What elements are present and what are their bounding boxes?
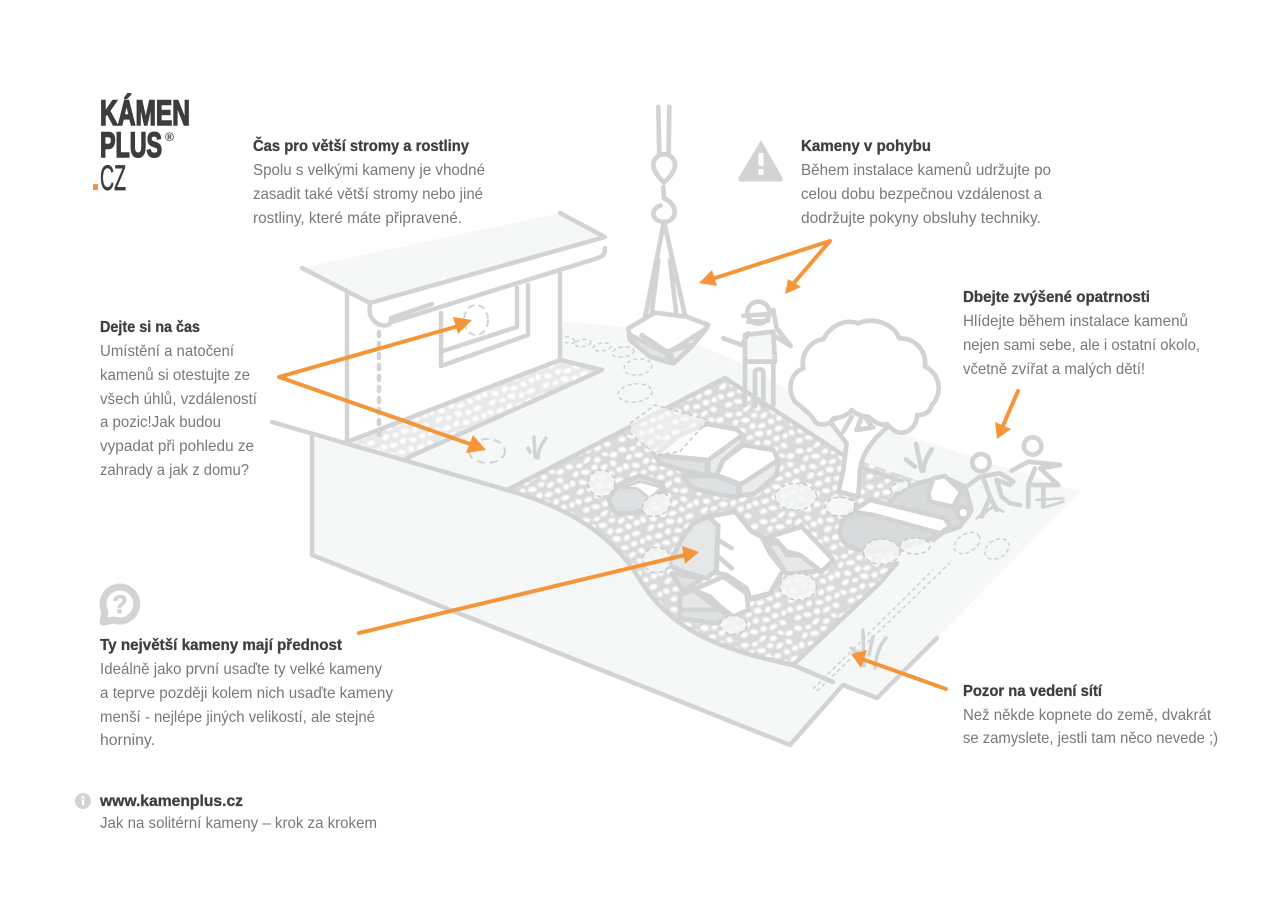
stone group back (655, 455, 707, 475)
text: Čas pro větší stromy a rostliny (253, 137, 485, 227)
crane hook and lifted stone (628, 107, 708, 363)
text: Kameny v pohybu: Kameny v pohybu (801, 138, 931, 155)
worker (723, 302, 791, 407)
text: source: Jak na solitérní kameny – krok za krokem (100, 815, 377, 832)
text: Ty největší kameny mají přednost: horniny. (100, 732, 155, 749)
window placement circle (464, 305, 488, 335)
small stone (608, 476, 665, 513)
text: Kameny v pohybu: dodržujte pokyny obsluhy techniky. (801, 210, 1041, 227)
text: Pozor na vedení sítí: Pozor na vedení sítí (963, 683, 1103, 700)
arrow: Ty největší kameny (359, 546, 699, 633)
house (302, 213, 605, 458)
child 2 (1012, 437, 1063, 507)
lawn and wall outline (272, 378, 937, 745)
arrow: Kameny v pohybu (699, 241, 830, 294)
child 1 (967, 454, 1020, 518)
illustration: garden scene (272, 107, 1080, 745)
text: Čas pro větší stromy a rostliny: zasadit také větší stromy nebo jiné (253, 186, 483, 203)
gravel bed (507, 378, 945, 665)
text: Čas pro větší stromy a rostliny: rostliny, které máte připravené. (253, 210, 462, 227)
text: Pozor na vedení sítí: se zamyslete, jestli tam něco nevede ;) (963, 730, 1218, 747)
roof surface (302, 213, 605, 303)
arrow: Dbejte zvýšené opatrnosti (995, 391, 1018, 439)
text: Ty největší kameny mají přednost (100, 637, 393, 749)
underground utility lines (813, 563, 950, 691)
logo: ® (165, 130, 174, 144)
text: Kameny v pohybu (801, 138, 1051, 227)
text: Kameny v pohybu: Během instalace kamenů udržujte po (801, 161, 1051, 179)
text: Dejte si na čas: zahrady a jak z domu? (100, 462, 249, 479)
tree (790, 321, 939, 497)
arrow: Dejte si na čas (279, 317, 486, 453)
logo: PLUS (100, 126, 162, 165)
text: Pozor na vedení sítí (963, 683, 1218, 747)
text: Dejte si na čas: Dejte si na čas (100, 319, 200, 336)
lawn placement ellipse (469, 439, 505, 463)
arrow: Pozor na vedení sítí (851, 650, 946, 689)
logo (93, 93, 190, 198)
ground surface (314, 322, 1080, 745)
main stones (588, 405, 857, 634)
text: Dejte si na čas (100, 319, 258, 479)
text: Dbejte zvýšené opatrnosti (963, 289, 1200, 378)
icon: question bubble (103, 587, 137, 622)
grass tuft (906, 444, 932, 471)
text: Ty největší kameny mají přednost: Ty největší kameny mají přednost (100, 637, 342, 654)
text: Ty největší kameny mají přednost: menší - nejlépe jiných velikostí, ale stejné (100, 709, 375, 726)
icon: warning triangle (739, 141, 782, 181)
text: Ty největší kameny mají přednost: Ideálně jako první usaďte ty velké kameny (100, 661, 382, 678)
text: source (99, 793, 377, 832)
logo: CZ (100, 159, 126, 198)
text: Dejte si na čas: Umístění a natočení (100, 343, 235, 360)
text: Dejte si na čas: kamenů si otestujte ze (100, 366, 250, 384)
text: Čas pro větší stromy a rostliny: Spolu s velkými kameny je vhodné (253, 162, 485, 179)
text: Dejte si na čas: a pozic!Jak budou (100, 414, 221, 431)
text: Dbejte zvýšené opatrnosti: včetně zvířat a malých dětí! (963, 361, 1145, 378)
footprints and placement marks (561, 336, 1013, 564)
gravel strip by the house (350, 360, 602, 458)
grass tuft (528, 437, 546, 458)
text: Čas pro větší stromy a rostliny: Čas pro větší stromy a rostliny (253, 137, 469, 155)
icon: info (75, 793, 91, 809)
text: Dejte si na čas: všech úhlů, vzdáleností (100, 390, 258, 408)
text: Pozor na vedení sítí: Než někde kopnete do země, dvakrát (963, 707, 1212, 724)
text: Kameny v pohybu: celou dobu bezpečnou vzdálenost a (801, 186, 1042, 203)
text: source: www.kamenplus.cz (99, 793, 243, 810)
logo: KÁMEN (100, 93, 190, 133)
text: Dbejte zvýšené opatrnosti: nejen sami sebe, ale i ostatní okolo, (963, 337, 1200, 354)
tree, side stones and children (790, 321, 1063, 564)
text: Dbejte zvýšené opatrnosti: Dbejte zvýšené opatrnosti (963, 289, 1150, 306)
text: Ty největší kameny mají přednost: a teprve později kolem nich usaďte kameny (100, 685, 393, 702)
grass tuft by pipes (851, 630, 886, 668)
ghost stone outline (630, 405, 708, 455)
ghost stones (588, 470, 857, 634)
icon: question bubble: ? (112, 591, 128, 619)
text: Dbejte zvýšené opatrnosti: Hlídejte během instalace kamenů (963, 312, 1188, 330)
large stone group (672, 573, 702, 592)
text: Dejte si na čas: vypadat při pohledu ze (100, 438, 254, 455)
side stones (840, 476, 972, 551)
